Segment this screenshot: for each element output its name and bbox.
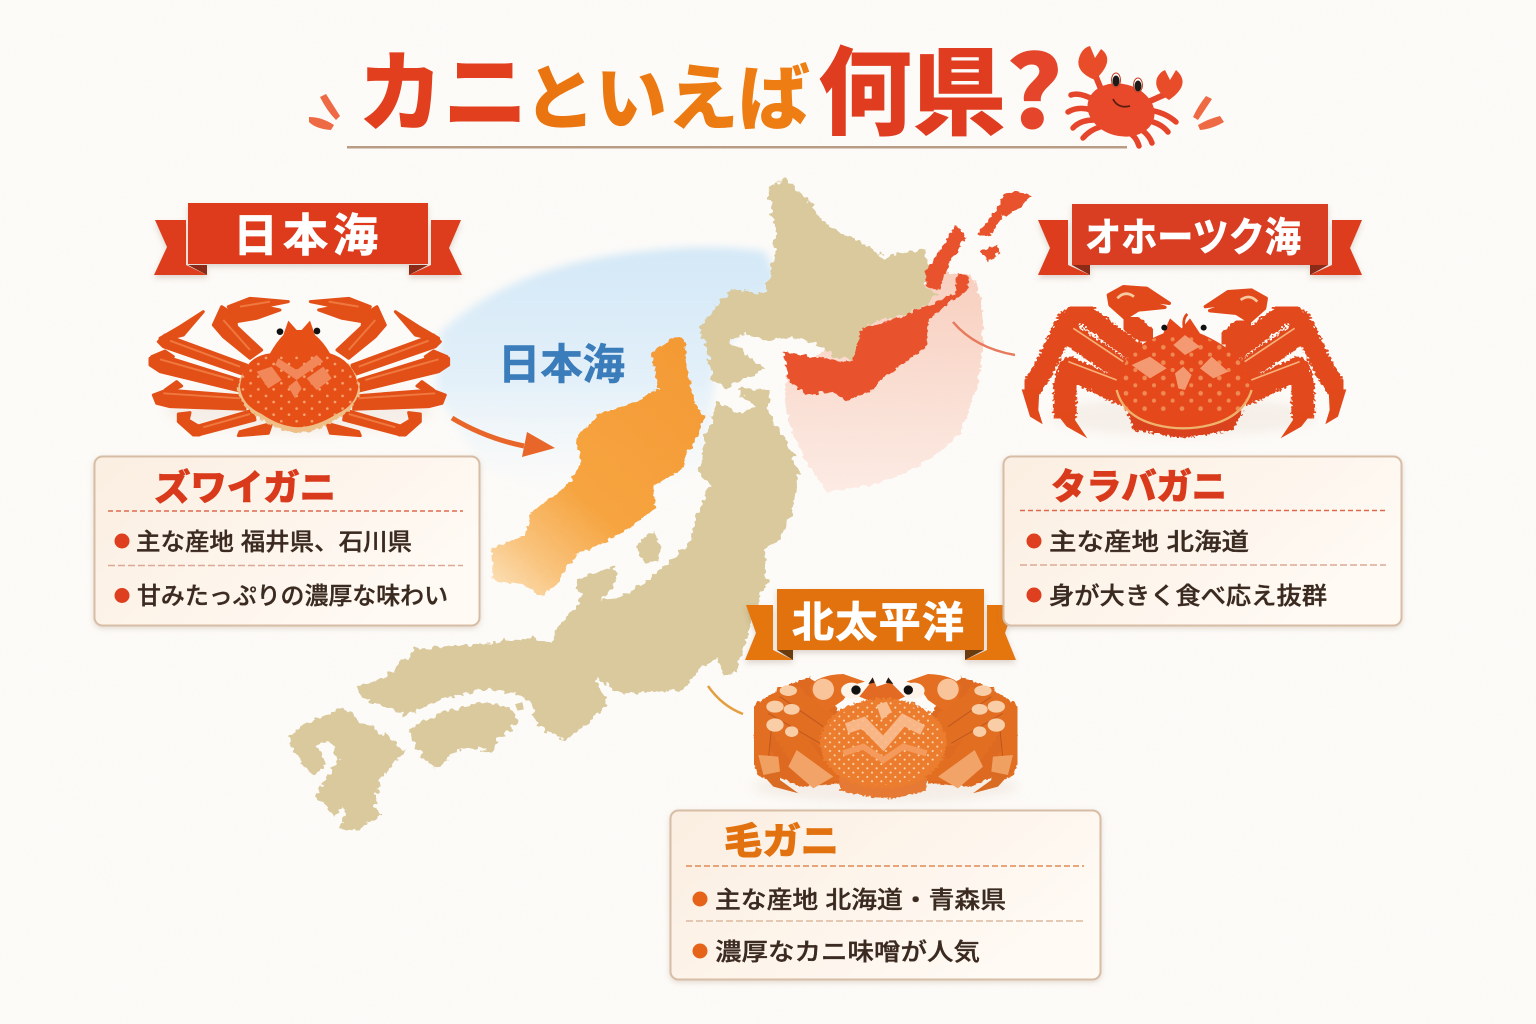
banner: 日本海: [154, 203, 462, 275]
title: といえば: といえば: [524, 40, 810, 145]
crab: タラバガニ: [1022, 287, 1346, 438]
connector: Okhotsk: [953, 322, 1015, 355]
crab: 毛ガニ: [752, 674, 1019, 803]
map of Japan: [287, 179, 1031, 832]
text: origin: 主な産地 福井県、石川県: [136, 529, 412, 556]
bullet: taste: [114, 588, 130, 603]
panel: ズワイガニ card: [94, 456, 480, 626]
title underline: [347, 146, 1127, 148]
banner: 北太平洋: 北太平洋: [792, 599, 964, 646]
card title: ズワイガニ: ズワイガニ: [154, 467, 336, 508]
bullet: origin: [114, 534, 130, 548]
Kyushu: [287, 709, 405, 832]
arrow: to Sea of Japan coast: [452, 418, 555, 457]
title sparks right: [1193, 96, 1224, 130]
text: taste: 濃厚なカニ味噌が人気: [715, 939, 980, 966]
Sea of Japan coast highlight: [491, 337, 706, 595]
banner: オホーツク海: [1038, 204, 1362, 275]
banner: オホーツク海: オホーツク海: [1085, 216, 1301, 260]
text: taste: 身が大きく食べ応え抜群: [1049, 583, 1327, 610]
card title: タラバガニ: タラバガニ: [1051, 466, 1227, 507]
Shikoku: [408, 702, 520, 768]
bullet: taste: [1026, 588, 1042, 602]
title sparks left: [309, 94, 340, 130]
Awaji island: [515, 702, 524, 711]
title: カニ: カニ: [358, 23, 528, 150]
bullet: origin: [692, 892, 708, 906]
crab: ズワイガニ: [150, 298, 449, 436]
banner: 日本海: 日本海: [233, 210, 378, 261]
bullet: taste: [692, 944, 708, 958]
bullet: origin: [1026, 534, 1042, 548]
title: question mark: ?: [1005, 12, 1063, 157]
card title: 毛ガニ: 毛ガニ: [724, 821, 839, 862]
Pacific tint: [785, 273, 983, 493]
banner: 北太平洋: [745, 589, 1016, 660]
icon: mascot crab: [1068, 46, 1183, 146]
Sea of Japan tint: [435, 247, 779, 512]
text: origin: 主な産地 北海道・青森県: [715, 887, 1006, 914]
Honshu: [358, 388, 799, 741]
connector: Pacific: [708, 686, 743, 714]
text: origin: 主な産地 北海道: [1049, 529, 1249, 556]
panel: 毛ガニ card: [670, 810, 1100, 980]
title: [358, 12, 1063, 157]
panel: タラバガニ card: [1004, 456, 1402, 626]
title: 何県: 何県: [818, 16, 1006, 155]
Hokkaido: [699, 179, 937, 388]
Sado island: [636, 531, 660, 563]
map label: 日本海: 日本海: [498, 341, 625, 388]
Okhotsk coast highlight: [784, 191, 1031, 401]
text: taste: 甘みたっぷりの濃厚な味わい: [137, 583, 448, 610]
